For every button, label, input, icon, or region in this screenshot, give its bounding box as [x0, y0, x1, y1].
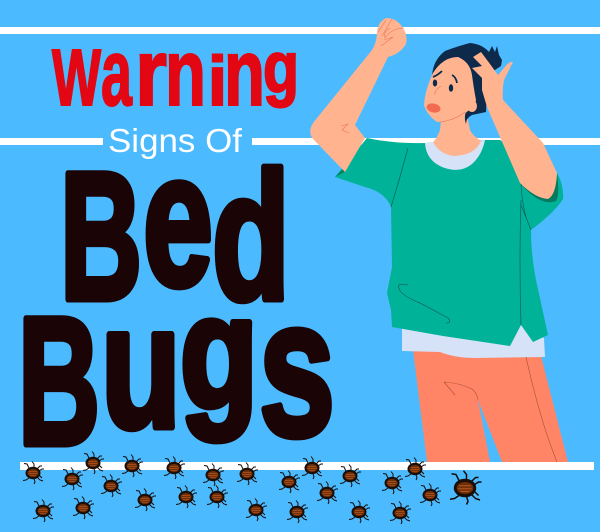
heading: Bugs: u — [101, 270, 181, 465]
bug — [122, 454, 143, 477]
bug — [340, 464, 361, 487]
heading: Warning: g — [263, 28, 299, 108]
heading: Warning: n — [224, 20, 265, 126]
heading: Warning: i — [208, 42, 227, 120]
bug — [164, 456, 185, 479]
heading: Bed: B — [60, 134, 142, 338]
bug — [246, 498, 267, 521]
bug — [73, 496, 94, 519]
ear — [467, 100, 477, 112]
pants — [413, 350, 568, 462]
face — [424, 57, 476, 122]
bug — [207, 486, 228, 508]
bug — [287, 500, 308, 523]
bug — [349, 500, 370, 523]
t-shirt — [335, 138, 563, 346]
bug — [420, 484, 441, 506]
neck — [433, 110, 481, 156]
trouser crease — [444, 357, 557, 462]
middle white line left — [0, 138, 103, 145]
heading: Signs Of: Signs Of — [108, 122, 243, 159]
raised arm and fist — [310, 18, 407, 172]
bug — [302, 456, 323, 479]
middle white line right — [252, 138, 600, 145]
fist and elbow details — [341, 19, 404, 133]
bug — [382, 472, 403, 494]
illustration: worried person — [310, 18, 568, 462]
mouth — [426, 102, 441, 114]
right arm and hand — [472, 52, 557, 199]
hair — [432, 43, 502, 124]
heading: Bed: d — [212, 134, 290, 338]
heading: Bed: e — [143, 114, 213, 326]
bug — [176, 486, 197, 508]
sleeve shadow — [335, 168, 346, 177]
bug — [237, 462, 258, 485]
shirt seams — [391, 148, 531, 325]
right eye — [449, 84, 453, 92]
heading: Warning: n — [165, 20, 206, 126]
bug — [33, 500, 54, 522]
eyes — [433, 80, 437, 86]
bug — [405, 458, 426, 480]
top white line — [0, 27, 600, 34]
bug — [83, 452, 104, 474]
bug — [317, 482, 338, 504]
collar — [425, 140, 485, 170]
eyebrows — [433, 71, 457, 83]
heading: Warning: a — [101, 20, 133, 126]
nose and jaw lines — [435, 86, 465, 122]
heading: Warning: W — [52, 33, 101, 122]
bottom white line — [20, 462, 594, 470]
large bug — [450, 471, 482, 504]
bug — [135, 488, 156, 511]
bug — [390, 502, 411, 524]
heading: Bugs: B — [18, 279, 100, 483]
bug — [23, 462, 44, 484]
undershirt hem — [402, 322, 545, 358]
heading: Warning: r — [135, 20, 167, 126]
right sleeve shadow — [520, 173, 558, 202]
bed bugs group — [23, 452, 482, 524]
heading: Bugs: s — [259, 259, 335, 477]
bug — [101, 474, 122, 497]
heading: Bugs: g — [180, 262, 258, 441]
bug — [279, 470, 300, 493]
bug — [62, 468, 83, 490]
bug — [203, 464, 224, 486]
